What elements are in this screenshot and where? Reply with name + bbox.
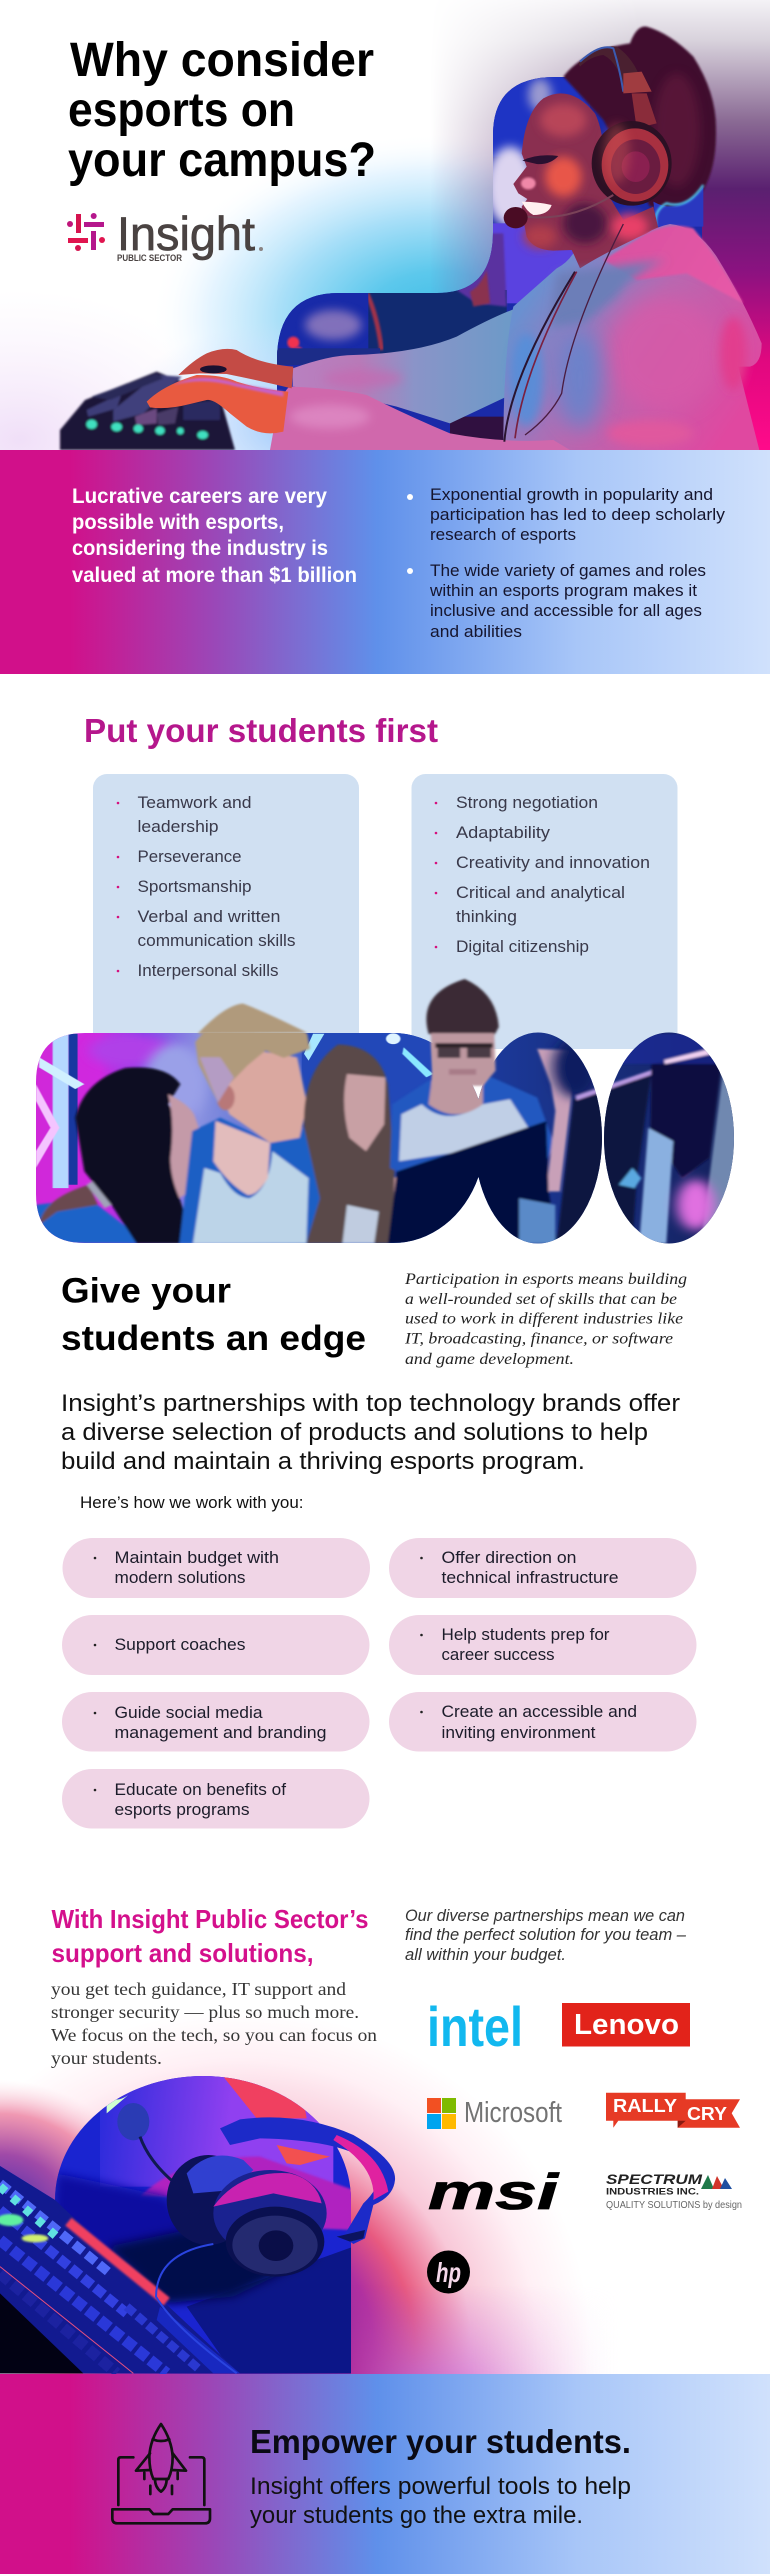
italic intro text — [404, 1271, 687, 1368]
support body text: stronger security — plus so much more. — [51, 2002, 359, 2022]
footer heading: Empower your students. — [250, 2423, 631, 2460]
second boy — [390, 1077, 554, 1175]
pill: budget: modern solutions — [114, 1568, 246, 1587]
foam mic — [117, 2103, 149, 2140]
panel: empower footer band — [0, 2374, 770, 2574]
italic intro text: a well-rounded set of skills that can be — [405, 1291, 677, 1308]
partners intro italic: all within your budget. — [405, 1945, 566, 1964]
boys' heads rising above the photo — [198, 979, 499, 1086]
logo: Rally Cry: CRY — [687, 2104, 727, 2124]
hero title: your campus? — [68, 134, 376, 187]
bullet list: growth and inclusivity: and abilities — [430, 622, 522, 641]
mic boom — [527, 195, 613, 217]
photo: students at monitors — [30, 979, 737, 1249]
headset photo — [0, 2073, 395, 2373]
bullet list: growth and inclusivity — [407, 485, 726, 641]
panel: skills card left: leadership — [138, 817, 218, 836]
pill: social media — [62, 1692, 370, 1752]
support body text: We focus on the tech, so you can focus on — [51, 2025, 377, 2045]
hero title: Why consider — [70, 34, 374, 87]
logo: Lenovo — [562, 2003, 690, 2046]
panel: skills card left: Teamwork and — [138, 793, 252, 812]
panel: skills card left: Perseverance — [138, 847, 242, 866]
logo: Lenovo: Lenovo — [574, 2009, 679, 2041]
monitor three — [650, 1049, 723, 1178]
panel: skills card right: Strong negotiation — [456, 793, 598, 812]
pill: coaches — [62, 1615, 370, 1675]
italic intro text: IT, broadcasting, finance, or software — [404, 1330, 673, 1348]
face and neck — [513, 93, 658, 268]
panel: support and partners — [0, 1904, 770, 2374]
logo: Rally Cry — [606, 2093, 740, 2128]
support body text: your students. — [51, 2048, 162, 2068]
panel: skills card left: Interpersonal skills — [138, 961, 278, 980]
pill: infrastructure: technical infrastructure — [442, 1568, 618, 1587]
heading: give your students an edge: students an edge — [61, 1319, 366, 1358]
mic foam — [504, 207, 528, 228]
panel: hero — [0, 0, 770, 453]
pill: budget — [62, 1538, 370, 1598]
pill: environment — [389, 1692, 696, 1752]
pill: social media: Guide social media — [114, 1703, 263, 1722]
footer background — [0, 2374, 770, 2574]
italic intro text: and game development. — [405, 1351, 574, 1368]
partnerships paragraph: Insight’s partnerships with top technology brands offer — [61, 1390, 680, 1417]
panel: skills card right: Digital citizenship — [456, 937, 589, 956]
panel: gradient facts band — [0, 450, 770, 674]
panel: skills card right — [412, 774, 678, 1049]
hero title — [68, 34, 376, 187]
partnerships paragraph: a diverse selection of products and solutions to help — [61, 1419, 648, 1446]
panel: skills card right: Creativity and innovation — [456, 853, 650, 872]
logo: Spectrum Industries — [606, 2171, 742, 2211]
italic intro text: used to work in different industries like — [405, 1310, 683, 1328]
headband — [220, 2117, 395, 2244]
support heading: With Insight Public Sector’s — [52, 1904, 368, 1934]
pill: environment: Create an accessible and — [442, 1702, 637, 1721]
panel: skills card left: Verbal and written — [138, 907, 280, 926]
pill: coaches: Support coaches — [114, 1635, 246, 1654]
how we work subheading: Here’s how we work with you: — [80, 1493, 304, 1512]
headset — [578, 46, 672, 206]
heading: give your students an edge — [61, 1272, 366, 1358]
hero photo: student gamer at keyboard — [60, 27, 762, 453]
band background — [0, 450, 770, 674]
panel: skills card right: Adaptability — [456, 823, 551, 842]
first boy — [177, 1116, 322, 1243]
support heading: support and solutions, — [52, 1938, 314, 1968]
footer text — [250, 2473, 631, 2529]
support body text — [51, 1979, 377, 2068]
bullet list: growth and inclusivity: Exponential growth in popularity and — [430, 485, 713, 504]
pill: benefits: Educate on benefits of — [114, 1780, 286, 1799]
key claim text: valued at more than $1 billion — [72, 564, 357, 587]
panel: skills card right: Critical and analytical — [456, 883, 625, 902]
heading: put your students first: Put your students first — [84, 712, 438, 749]
partners intro italic: find the perfect solution for you team – — [405, 1925, 687, 1944]
panel: skills card left: communication skills — [138, 931, 296, 950]
pill list: how we work — [62, 1538, 696, 1828]
icon: rocket launching from laptop — [112, 2424, 210, 2523]
logo: Spectrum Industries: INDUSTRIES INC. — [606, 2186, 699, 2198]
pill: career prep: Help students prep for — [442, 1625, 610, 1644]
logo: Spectrum Industries: SPECTRUM — [606, 2171, 702, 2187]
partners intro italic — [405, 1906, 687, 1964]
logo: Microsoft: Microsoft — [464, 2097, 562, 2129]
logo: Rally Cry: RALLY — [613, 2096, 677, 2116]
bullet list: growth and inclusivity: research of esports — [430, 525, 576, 544]
key claim text: possible with esports, — [72, 511, 284, 534]
key claim text: considering the industry is — [72, 537, 328, 560]
hair — [563, 27, 716, 207]
front ear cup — [213, 2170, 327, 2257]
partners intro italic: Our diverse partnerships mean we can — [405, 1906, 685, 1925]
lower arm — [270, 387, 570, 450]
Insight Public Sector logo — [67, 207, 263, 263]
pill: infrastructure — [389, 1538, 696, 1598]
section gradient background — [0, 2037, 590, 2374]
key claim text — [72, 485, 357, 587]
cable — [156, 2244, 237, 2373]
pill: benefits: esports programs — [114, 1800, 250, 1819]
logo: HP — [427, 2250, 470, 2294]
monitor one — [388, 1121, 558, 1244]
partnerships paragraph — [61, 1390, 680, 1475]
logo: HP: hp — [436, 2257, 461, 2288]
back ear cup — [167, 2155, 250, 2245]
forward arm — [293, 309, 537, 423]
support heading — [52, 1904, 368, 1968]
panel: skills card right: thinking — [456, 907, 517, 926]
bullet list: growth and inclusivity: inclusive and accessible for all ages — [430, 601, 702, 620]
bullet list: growth and inclusivity: participation has led to deep scholarly — [430, 505, 726, 524]
logo: MSI: msi — [428, 2164, 560, 2220]
hero title: esports on — [68, 84, 295, 137]
logo: Microsoft — [427, 2097, 562, 2129]
italic intro text: Participation in esports means building — [404, 1271, 687, 1288]
logo: Intel: intel — [427, 1995, 523, 2058]
heading: give your students an edge: Give your — [61, 1272, 231, 1310]
pill: budget: Maintain budget with — [114, 1548, 279, 1567]
logo: Spectrum Industries: QUALITY SOLUTIONS by design — [606, 2200, 742, 2211]
panel: skills card left — [93, 774, 359, 1049]
pill: benefits — [62, 1769, 370, 1828]
pill: career prep: career success — [442, 1645, 554, 1664]
hoodie — [503, 224, 762, 450]
Insight Public Sector logo: PUBLIC SECTOR — [117, 253, 182, 263]
second girl — [304, 1045, 395, 1244]
footer text: your students go the extra mile. — [250, 2502, 583, 2529]
pill: environment: inviting environment — [442, 1723, 596, 1742]
monitor two — [557, 1072, 651, 1244]
bullet list: growth and inclusivity: The wide variety of games and roles — [430, 561, 706, 580]
panel: skills card left: Sportsmanship — [138, 877, 252, 896]
first girl jacket — [36, 1201, 138, 1243]
hero gradient background — [0, 0, 770, 450]
bullet list: growth and inclusivity: within an esports program makes it — [429, 581, 697, 600]
footer text: Insight offers powerful tools to help — [250, 2473, 631, 2500]
pill: career prep — [389, 1615, 696, 1675]
cords — [504, 272, 575, 442]
keyboard and hands — [60, 349, 293, 450]
pill: social media: management and branding — [114, 1723, 326, 1742]
Insight Public Sector logo: Insight — [117, 207, 255, 260]
blue shape behind neck — [653, 187, 703, 227]
partnerships paragraph: build and maintain a thriving esports program. — [61, 1448, 585, 1475]
support body text: you get tech guidance, IT support and — [51, 1979, 346, 1999]
pill: infrastructure: Offer direction on — [442, 1548, 576, 1567]
key claim text: Lucrative careers are very — [72, 485, 327, 508]
